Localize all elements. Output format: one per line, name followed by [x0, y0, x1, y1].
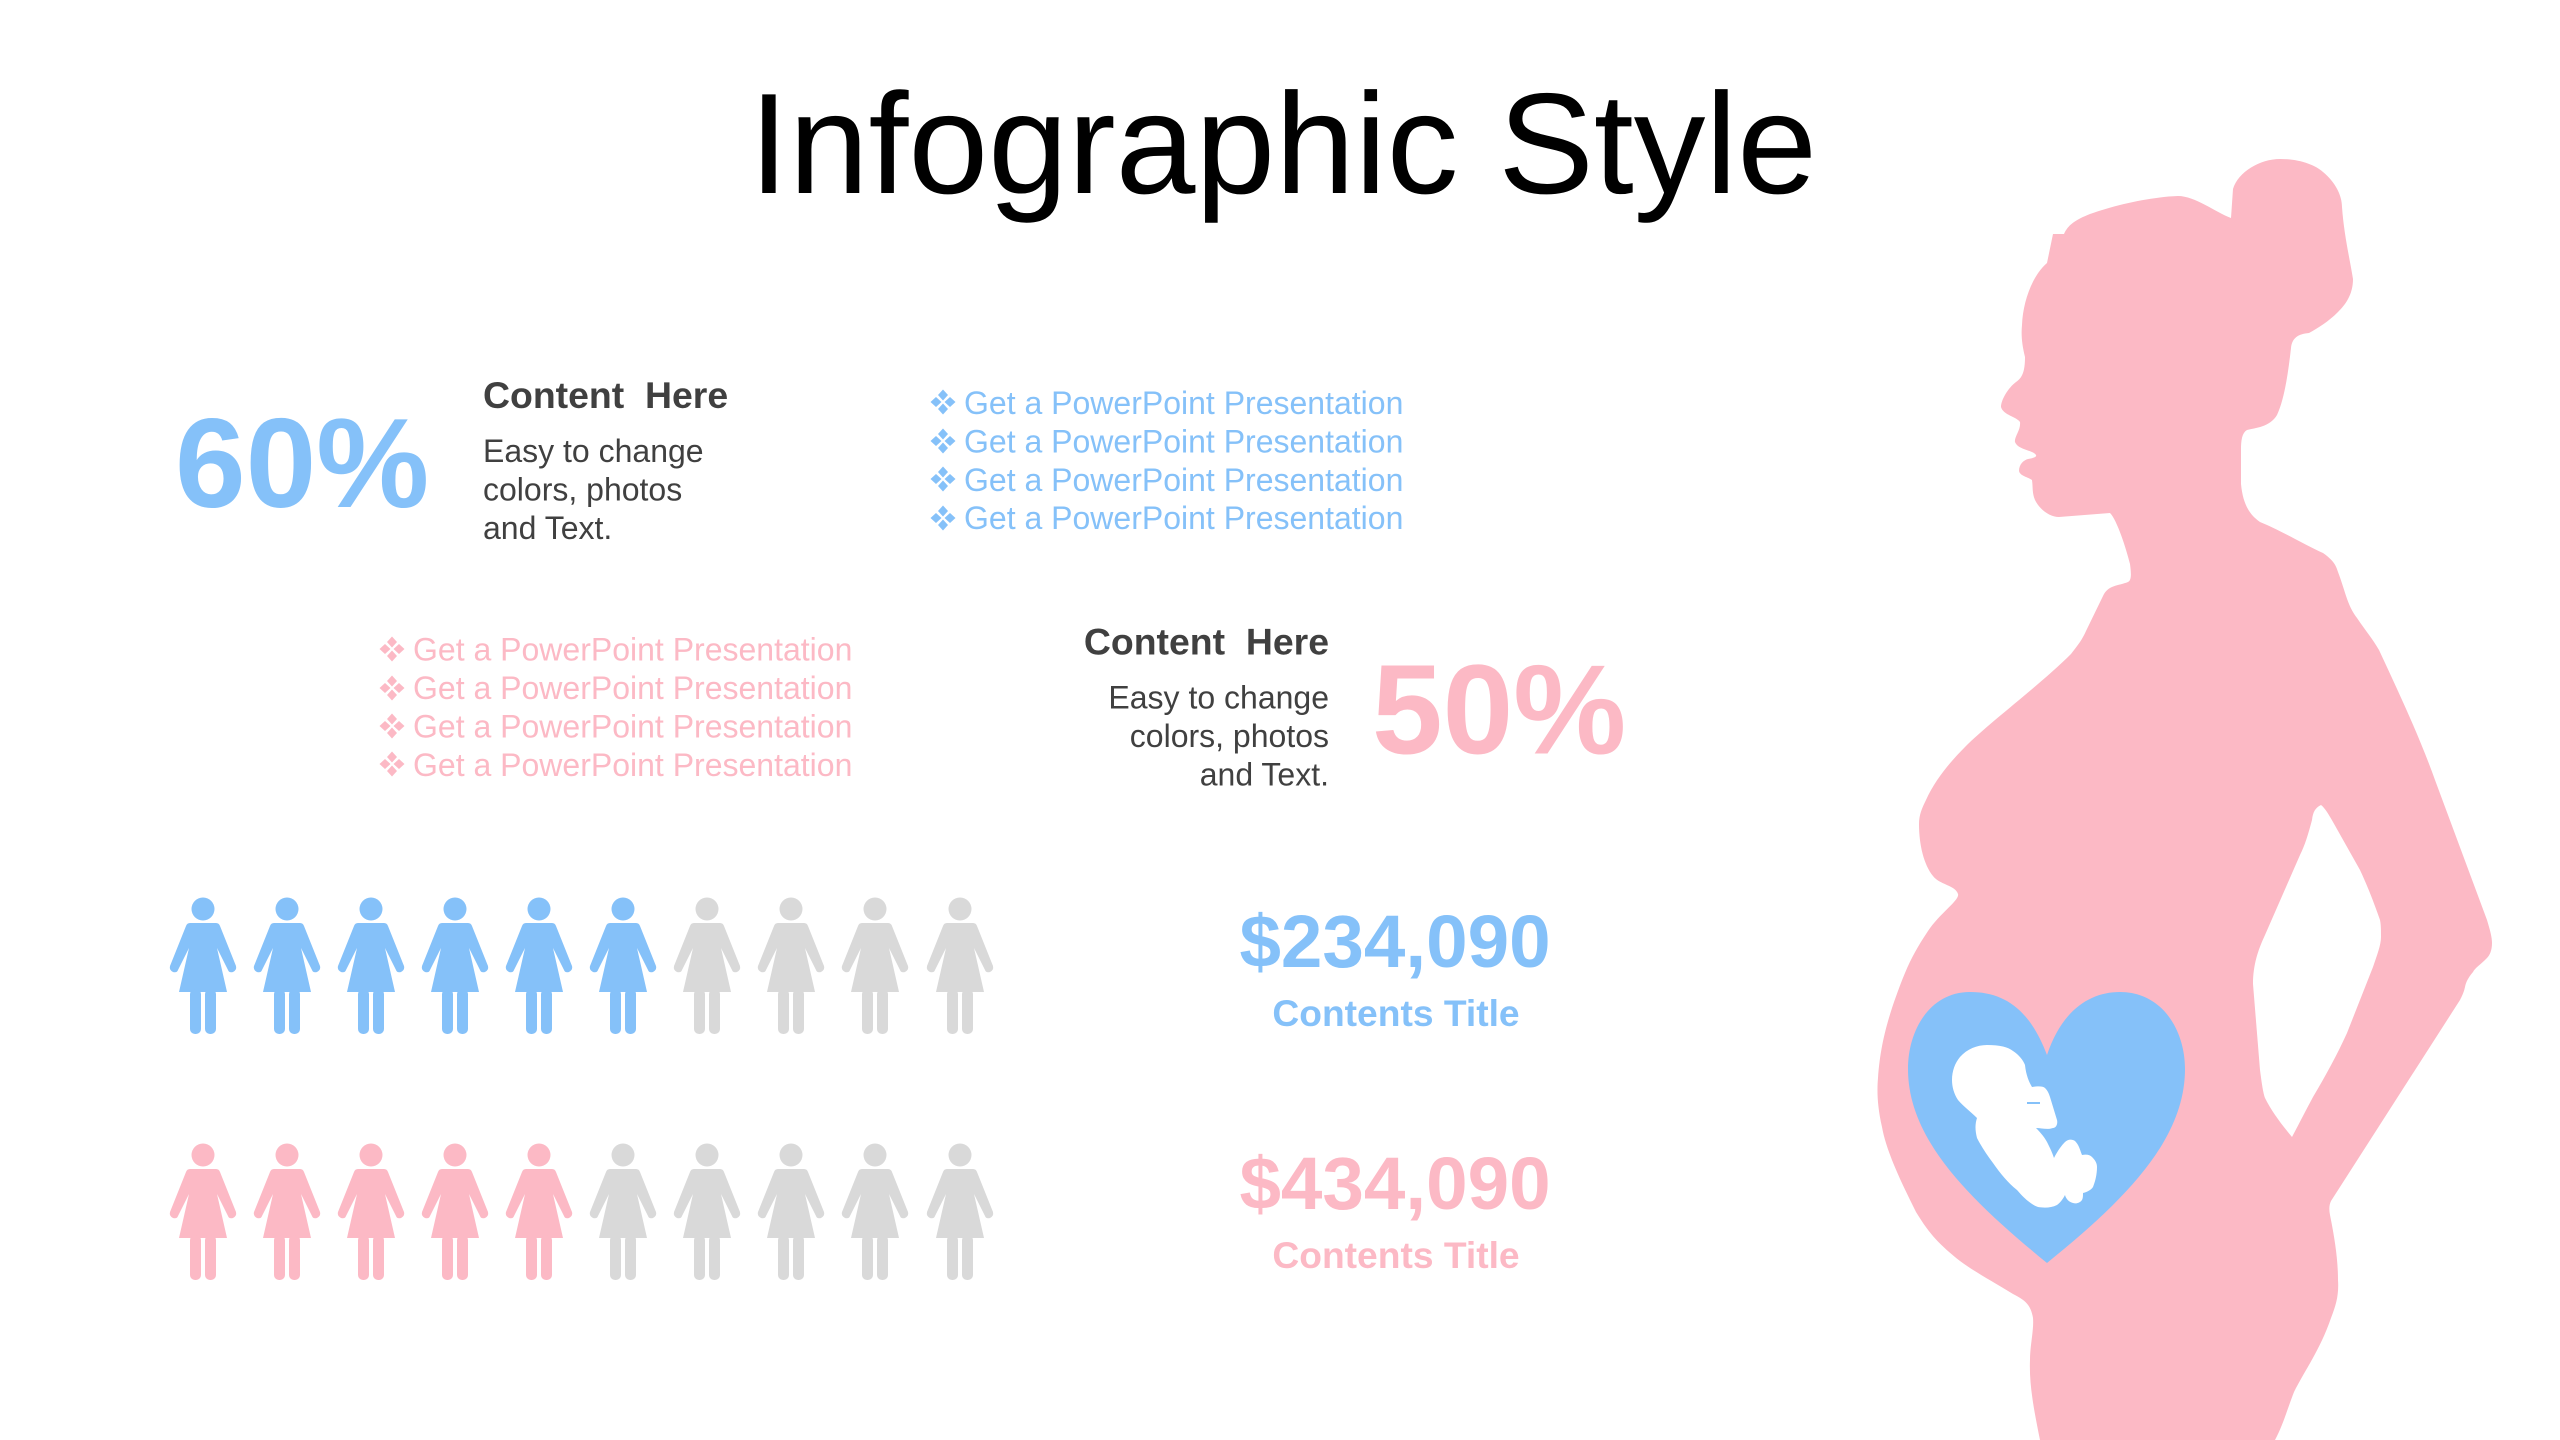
- illustration: pregnant woman silhouette: [1877, 159, 2492, 1440]
- title: Infographic Style: [749, 64, 1817, 224]
- body text: and Text.: [1200, 756, 1329, 792]
- panel: 50% statistic: [1084, 620, 1626, 792]
- bullet icons: [380, 636, 404, 776]
- body text: Easy to change: [483, 433, 704, 469]
- bullet text: Get a PowerPoint Presentation: [964, 385, 1403, 421]
- value: $234,090: [1239, 899, 1551, 983]
- caption: Contents Title: [1272, 992, 1520, 1034]
- heading: Content Here: Content Here: [1084, 620, 1329, 662]
- silhouette: [1877, 159, 2492, 1440]
- bullet text: Get a PowerPoint Presentation: [413, 747, 852, 783]
- fetus: [1952, 1045, 2097, 1208]
- bullet text: Get a PowerPoint Presentation: [413, 670, 852, 706]
- value: $434,090: [1239, 1141, 1551, 1225]
- big number 50%: 50%: [1372, 638, 1626, 780]
- bullet text: Get a PowerPoint Presentation: [964, 500, 1403, 536]
- body text: colors, photos: [483, 472, 682, 508]
- pictogram: blue row, 6 of 10: [170, 898, 993, 1034]
- body text: and Text.: [483, 510, 612, 546]
- panel: blue bullet list: [930, 385, 1403, 536]
- caption: Contents Title: [1272, 1234, 1520, 1276]
- panel: 60% statistic: [175, 374, 728, 546]
- bullet icons: [930, 390, 956, 530]
- heading: Content Here: Content Here: [483, 374, 728, 416]
- stat: $234,090: [1239, 899, 1551, 1034]
- body text: colors, photos: [1130, 718, 1329, 754]
- stat: $434,090: [1239, 1141, 1551, 1276]
- pictogram: pink row, 5 of 10: [170, 1144, 993, 1280]
- panel: pink bullet list: [380, 632, 852, 783]
- big number 60%: 60%: [175, 392, 429, 534]
- body text: Easy to change: [1108, 680, 1329, 716]
- heart: [1908, 992, 2185, 1263]
- bullet text: Get a PowerPoint Presentation: [413, 708, 852, 744]
- bullet text: Get a PowerPoint Presentation: [413, 632, 852, 668]
- bullet text: Get a PowerPoint Presentation: [964, 424, 1403, 460]
- fetus eye detail: [2027, 1102, 2040, 1104]
- bullet text: Get a PowerPoint Presentation: [964, 462, 1403, 498]
